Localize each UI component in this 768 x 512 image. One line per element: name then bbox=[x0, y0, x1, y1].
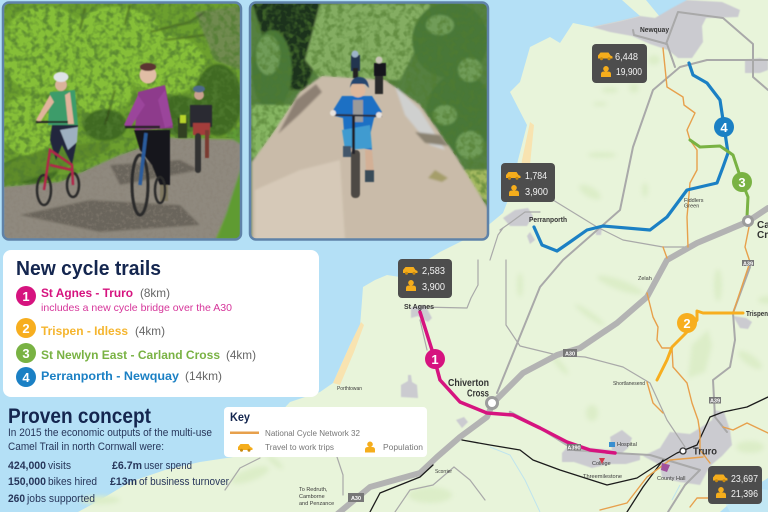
place labels: Scorrier bbox=[435, 469, 452, 475]
place labels: Hospital bbox=[617, 442, 637, 448]
trail 2: Trispen to Idless bbox=[657, 311, 743, 380]
far riders bbox=[351, 55, 360, 71]
text block: proven concept bbox=[8, 405, 229, 505]
trail row 1: includes a new cycle bridge over the A30 bbox=[41, 302, 232, 314]
place labels: Zelah bbox=[638, 276, 652, 282]
place labels: Perranporth bbox=[529, 217, 567, 224]
rider 2 bbox=[135, 85, 173, 130]
statistics: user spend bbox=[144, 460, 192, 472]
road labels: A30 bbox=[351, 496, 361, 502]
map markers bbox=[599, 442, 670, 472]
child bbox=[332, 96, 382, 150]
trail row 2: Trispen - Idless bbox=[41, 324, 128, 338]
intro paragraph: Camel Trail in north Cornwall were: bbox=[8, 441, 164, 453]
stat box: Truro: 23,697 bbox=[731, 473, 758, 485]
statistics: bikes hired bbox=[48, 476, 97, 488]
stat box: Newquay bbox=[592, 44, 647, 83]
key bbox=[224, 407, 427, 457]
trail row 4: (14km) bbox=[185, 369, 222, 383]
rider 3 bbox=[190, 105, 212, 127]
trail 4: Perranporth to Newquay: 4 bbox=[720, 120, 728, 135]
gravel texture bbox=[28, 162, 195, 230]
statistics bbox=[8, 460, 229, 505]
place labels: College bbox=[592, 461, 611, 467]
path and verge bbox=[3, 138, 242, 240]
place labels: Green bbox=[684, 204, 699, 210]
trail row 2 bbox=[16, 318, 165, 338]
statistics: visits bbox=[48, 460, 71, 472]
photo: family cyclists on woodland trail bbox=[0, 2, 242, 240]
roundabouts bbox=[486, 216, 752, 408]
road labels: A39 bbox=[743, 262, 753, 268]
heading: proven concept: Proven concept bbox=[8, 405, 151, 428]
place labels: County Hall bbox=[657, 476, 685, 482]
place labels: Fiddlers bbox=[684, 198, 704, 204]
stat box: St Agnes: 3,900 bbox=[422, 281, 445, 293]
photo: child cycling on gravel track bbox=[250, 2, 494, 240]
trail row 4: Perranporth - Newquay bbox=[41, 369, 179, 383]
place labels: Threemilestone bbox=[583, 474, 622, 480]
road labels: A39 bbox=[710, 398, 720, 404]
statistics: £13m bbox=[110, 476, 137, 488]
track bbox=[252, 76, 489, 240]
trail row 3: St Newlyn East - Carland Cross bbox=[41, 348, 220, 362]
statistics: 424,000 bbox=[8, 460, 46, 472]
trail 3: St Newlyn East to Carland Cross bbox=[690, 140, 752, 217]
trail row 3: 3 bbox=[22, 346, 30, 361]
estuary bbox=[720, 478, 768, 512]
intro paragraph bbox=[8, 427, 212, 453]
stat box: Perranporth: 3,900 bbox=[525, 186, 548, 198]
place labels: and Penzance bbox=[299, 501, 334, 507]
stat box: Perranporth bbox=[501, 163, 555, 202]
trail 2: Trispen to Idless: 2 bbox=[683, 316, 691, 331]
road labels bbox=[348, 260, 754, 502]
A30 trunk road bbox=[335, 208, 768, 512]
stat box: Perranporth: 1,784 bbox=[525, 170, 547, 182]
railway bbox=[370, 397, 768, 512]
trail 1: St Agnes to Truro: 1 bbox=[431, 352, 439, 367]
trail row 2: (4km) bbox=[135, 324, 165, 338]
place labels: St Agnes bbox=[404, 304, 434, 311]
trail row 4 bbox=[16, 367, 222, 387]
trail 4: Perranporth to Newquay bbox=[534, 63, 734, 251]
place labels: To Redruth, bbox=[299, 487, 328, 493]
background rider bbox=[178, 118, 187, 138]
place labels bbox=[299, 27, 768, 507]
key: National Cycle Network 32 bbox=[265, 429, 361, 438]
trail row 3 bbox=[16, 343, 256, 363]
stat box: Truro bbox=[708, 466, 762, 504]
statistics: 150,000 bbox=[8, 476, 46, 488]
place labels: Shortlanesend bbox=[613, 381, 645, 387]
key: Population bbox=[383, 443, 423, 452]
statistics: of business turnover bbox=[139, 476, 229, 488]
statistics: £6.7m bbox=[112, 460, 142, 472]
statistics: 260 bbox=[8, 493, 25, 505]
statistics: jobs supported bbox=[26, 493, 95, 505]
rider 1 bbox=[48, 90, 78, 125]
heading: new cycle trails: New cycle trails bbox=[16, 258, 161, 280]
place labels: Truro bbox=[693, 446, 717, 458]
road labels: A30 bbox=[565, 352, 575, 358]
woodland patches bbox=[80, 55, 768, 504]
beaches bbox=[333, 122, 534, 385]
stat box: St Agnes bbox=[398, 259, 452, 298]
place labels: Newquay bbox=[640, 27, 669, 34]
place labels: Camborne bbox=[299, 494, 325, 500]
place labels: Chiverton bbox=[448, 378, 489, 389]
river bbox=[490, 447, 680, 512]
road labels: A390 bbox=[567, 446, 581, 452]
trail row 2: 2 bbox=[22, 321, 30, 336]
place labels: Porthtowan bbox=[337, 386, 362, 392]
place labels: Cross bbox=[467, 388, 489, 400]
foliage texture bbox=[4, 4, 240, 187]
trail 1: St Agnes to Truro bbox=[420, 312, 615, 453]
trail row 1: (8km) bbox=[140, 286, 170, 300]
key: Key bbox=[230, 412, 251, 424]
trail 3: St Newlyn East to Carland Cross: 3 bbox=[738, 175, 746, 190]
stat box: Newquay: 6,448 bbox=[615, 51, 638, 63]
minor roads bbox=[225, 200, 690, 512]
urban areas bbox=[401, 0, 768, 485]
stat box: St Agnes: 2,583 bbox=[422, 265, 445, 277]
trail row 1 bbox=[16, 286, 232, 314]
National Cycle Network 32 bbox=[600, 48, 768, 510]
panel: new cycle trails bbox=[3, 250, 319, 397]
stat box: Truro: 21,396 bbox=[731, 488, 758, 500]
trail row 1: St Agnes - Truro bbox=[41, 286, 133, 300]
foliage texture bbox=[251, 4, 487, 204]
intro paragraph: In 2015 the economic outputs of the multi-use bbox=[8, 427, 212, 439]
trail row 1: 1 bbox=[22, 289, 30, 304]
key: Travel to work trips bbox=[265, 443, 334, 452]
stat box: Newquay: 19,900 bbox=[616, 66, 642, 78]
trail row 4: 4 bbox=[22, 370, 30, 385]
trail row 3: (4km) bbox=[226, 348, 256, 362]
